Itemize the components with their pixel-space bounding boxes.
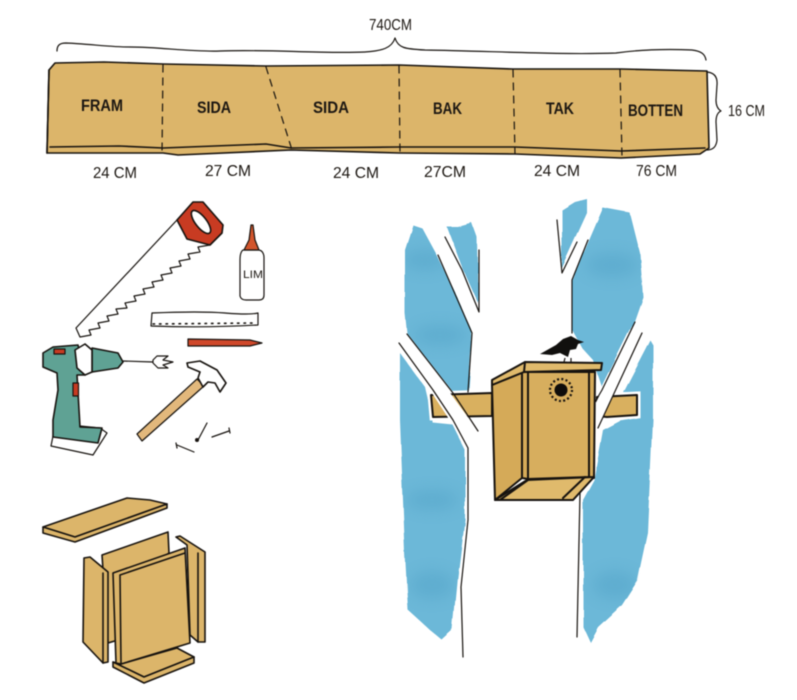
panel measurements: [93, 163, 677, 182]
watercolor shading: [403, 250, 638, 599]
fold lines: [162, 65, 622, 157]
right branch: [590, 322, 642, 428]
right side panel: [176, 536, 205, 642]
panel measurements: 27CM: [424, 164, 466, 181]
tree trunk lines: [438, 220, 588, 637]
height label: 16 CM: [728, 103, 765, 120]
plank cut diagram: [47, 17, 765, 182]
hammer: [137, 361, 226, 441]
panel measurements: 27 CM: [205, 163, 251, 180]
panel labels: TAK: [546, 99, 575, 118]
plank front edge: [47, 70, 705, 153]
sky watercolor: [400, 199, 653, 642]
exploded birdhouse parts: [43, 498, 205, 683]
pencil: [188, 339, 262, 346]
entrance hole: [550, 379, 572, 401]
panel measurements: 76 CM: [636, 163, 677, 180]
left branch: [399, 334, 478, 657]
nails: [176, 423, 230, 452]
panel measurements: 24 CM: [333, 165, 379, 182]
birdhouse in trees: [399, 199, 653, 657]
height brace: [707, 72, 721, 150]
tools: [43, 202, 264, 455]
panel measurements: 24 CM: [534, 163, 580, 180]
panel labels: [81, 96, 683, 120]
drill: [43, 344, 173, 455]
magpie: [540, 336, 584, 362]
left side panel: [83, 557, 108, 663]
panel measurements: 24 CM: [93, 165, 137, 182]
saw: [76, 202, 223, 337]
back panel: [102, 532, 169, 643]
glue bottle: [240, 225, 264, 300]
left support arm: [431, 393, 492, 417]
ruler: [151, 312, 258, 327]
panel labels: BAK: [433, 99, 463, 118]
roof board: [43, 498, 167, 542]
panel labels: SIDA: [197, 98, 231, 117]
panel labels: FRAM: [81, 96, 123, 115]
front panel: [113, 548, 190, 664]
right support arm: [597, 395, 637, 417]
panel labels: SIDA: [313, 98, 349, 117]
plank body: [47, 62, 709, 158]
glue bottle: LIM: [243, 269, 263, 281]
overall length brace: [57, 38, 706, 60]
birdhouse: [492, 362, 602, 500]
total length label: 740CM: [369, 17, 412, 34]
panel labels: BOTTEN: [628, 101, 683, 120]
bottom board: [113, 648, 194, 683]
